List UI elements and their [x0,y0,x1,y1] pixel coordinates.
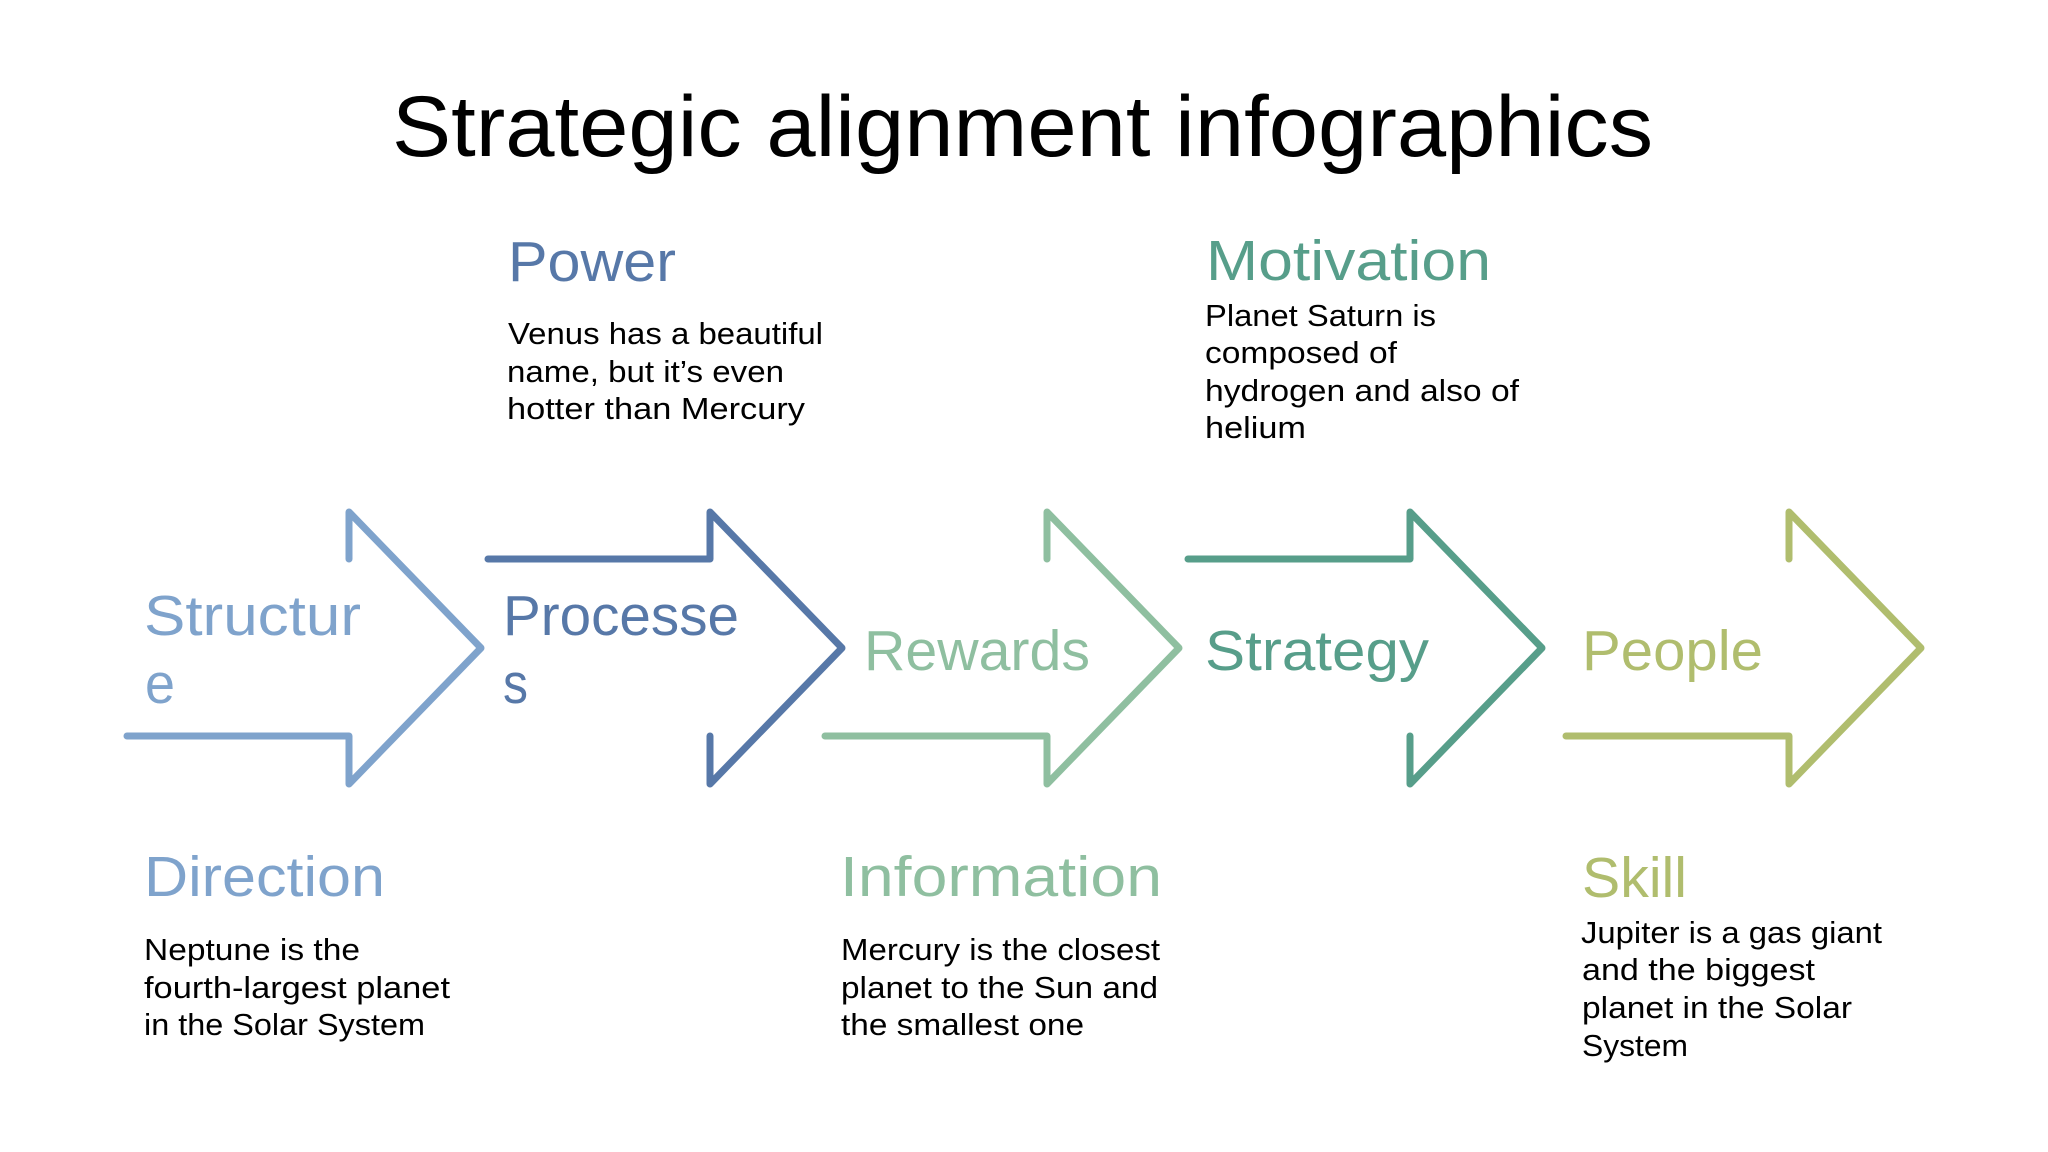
heading: Information: Information [840,845,1162,909]
heading: Power: Power [508,230,676,294]
text: Power description: Venus has a beautiful [508,316,823,351]
panel: Processes arrow and Power [488,230,842,784]
text: Power description [507,316,823,426]
arrow label: Rewards: Rewards [864,619,1090,683]
text: Skill description: System [1582,1028,1688,1063]
text: Information description: planet to the Sun and [841,970,1158,1005]
heading: Skill: Skill [1582,846,1687,910]
text: Motivation description: composed of [1205,335,1397,370]
text: Power description: name, but it’s even [507,354,784,389]
arrow label: Processes [503,584,739,716]
arrow: Strategy [1188,512,1542,784]
text: Information description: Mercury is the closest [841,932,1160,967]
text: Direction description: in the Solar System [144,1007,425,1042]
heading: Motivation: Motivation [1206,229,1491,293]
text: Direction description: fourth-largest planet [144,970,450,1005]
arrow label: Processes: Processe [503,584,739,648]
text: Skill description [1581,915,1882,1063]
text: Direction description: Neptune is the [144,932,360,967]
arrow: Rewards [825,512,1179,784]
arrow label: Strategy: Strategy [1205,619,1430,683]
arrow label: Processes: s [503,652,528,716]
panel: Structure arrow and Direction [127,512,481,1042]
text: Motivation description: Planet Saturn is [1205,298,1436,333]
panel: People arrow and Skill [1566,512,1921,1063]
heading: Direction: Direction [144,845,385,909]
arrow: Structure [127,512,481,784]
text: Motivation description [1205,298,1519,445]
title: Strategic alignment infographics [392,79,1653,175]
text: Direction description [144,932,450,1042]
arrow label: Structure [144,584,361,716]
arrow label: People: People [1582,619,1763,683]
panel: Strategy arrow and Motivation [1188,229,1542,784]
arrow: People [1566,512,1921,784]
text: Information description [841,932,1160,1042]
text: Information description: the smallest one [841,1007,1084,1042]
text: Power description: hotter than Mercury [507,391,806,426]
arrow: Processes [488,512,842,784]
text: Motivation description: hydrogen and also of [1205,373,1519,408]
text: Skill description: planet in the Solar [1582,990,1852,1025]
arrow label: Structure: Structur [144,584,361,648]
arrow label: Structure: e [145,652,175,716]
panel: Rewards arrow and Information [825,512,1179,1042]
text: Motivation description: helium [1205,410,1306,445]
text: Skill description: and the biggest [1582,952,1815,987]
text: Skill description: Jupiter is a gas giant [1581,915,1882,950]
